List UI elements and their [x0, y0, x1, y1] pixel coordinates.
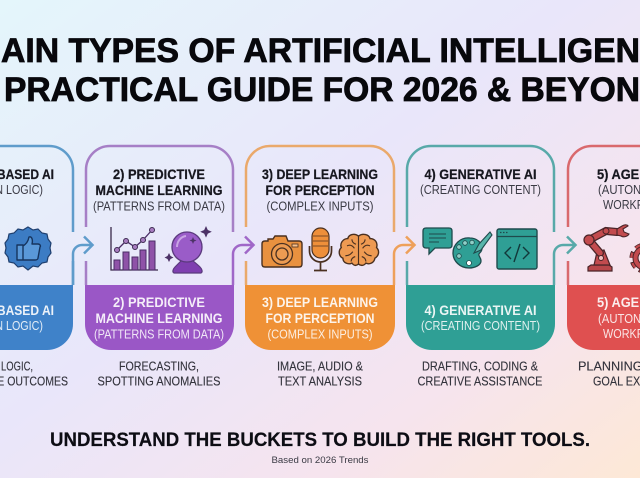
panel: 3 deep learning for perception — [245, 146, 395, 388]
title: AIN TYPES OF ARTIFICIAL INTELLIGEN — [1, 32, 640, 70]
band text — [597, 294, 640, 341]
band text — [262, 294, 378, 342]
heading: (COMPLEX INPUTS) — [266, 200, 374, 214]
description: IMAGE, AUDIO & — [277, 360, 364, 374]
coloured band — [406, 285, 555, 350]
heading: (PATTERNS FROM DATA) — [93, 200, 225, 214]
icon: palette and brush — [453, 232, 492, 268]
band text: 2) PREDICTIVE — [113, 294, 205, 310]
heading — [597, 166, 640, 212]
heading: 4) GENERATIVE AI — [424, 166, 536, 182]
icon: chat bubble — [423, 228, 452, 254]
heading — [262, 166, 378, 214]
description — [418, 360, 542, 388]
coloured band — [85, 285, 234, 350]
panel: 2 predictive machine learning — [85, 146, 234, 388]
band text — [421, 302, 540, 333]
heading — [93, 166, 225, 214]
description — [277, 360, 364, 388]
icon: camera — [262, 236, 302, 267]
arrow: 3 to 4 — [394, 236, 414, 285]
band text — [94, 294, 224, 342]
icon: crystal ball — [164, 226, 212, 273]
description: TEXT ANALYSIS — [278, 374, 362, 388]
band text: MACHINE LEARNING — [96, 310, 223, 326]
panel: 5 agentic AI — [567, 146, 640, 388]
band text — [0, 303, 54, 333]
icon: brain — [339, 234, 379, 265]
description: DRAFTING, CODING & — [422, 360, 539, 374]
band text: (CREATING CONTENT) — [421, 319, 540, 333]
heading: 3) DEEP LEARNING — [262, 166, 378, 182]
description: SPOTTING ANOMALIES — [98, 374, 220, 388]
band text: (COMPLEX INPUTS) — [268, 328, 372, 342]
heading: FOR PERCEPTION — [266, 182, 374, 198]
band text: 4) GENERATIVE AI — [424, 302, 536, 318]
arrow: 4 to 5 — [554, 236, 576, 285]
panel: 4 generative AI — [406, 146, 555, 388]
icon: bar chart — [111, 227, 158, 270]
band text: FOR PERCEPTION — [266, 310, 374, 326]
panel: 1 rule-based AI — [0, 146, 73, 388]
heading: 2) PREDICTIVE — [113, 166, 205, 182]
heading — [0, 167, 54, 197]
icon: code window — [497, 229, 537, 269]
description — [98, 360, 220, 388]
heading: MACHINE LEARNING — [96, 182, 223, 198]
coloured band — [567, 285, 640, 350]
arrow: 2 to 3 — [233, 236, 254, 285]
heading: (CREATING CONTENT) — [420, 183, 541, 197]
description: FORECASTING, — [119, 360, 199, 374]
title — [1, 32, 640, 109]
description — [0, 360, 68, 388]
coloured band — [245, 285, 395, 350]
band text: (PATTERNS FROM DATA) — [94, 328, 224, 342]
coloured band — [0, 285, 73, 350]
icon: thumbs up badge — [5, 227, 51, 270]
source note: Based on 2026 Trends — [272, 455, 369, 466]
heading — [420, 166, 541, 197]
icon: microphone — [310, 228, 332, 270]
title: PRACTICAL GUIDE FOR 2026 & BEYON — [4, 71, 640, 109]
arrow: 1 to 2 — [73, 236, 92, 285]
tagline: UNDERSTAND THE BUCKETS TO BUILD THE RIGHT TOOLS. — [50, 430, 590, 451]
description: CREATIVE ASSISTANCE — [418, 374, 542, 388]
description — [578, 360, 640, 388]
icon: gear — [632, 245, 640, 271]
icon: robot arm — [584, 225, 629, 271]
band text: 3) DEEP LEARNING — [262, 294, 378, 310]
